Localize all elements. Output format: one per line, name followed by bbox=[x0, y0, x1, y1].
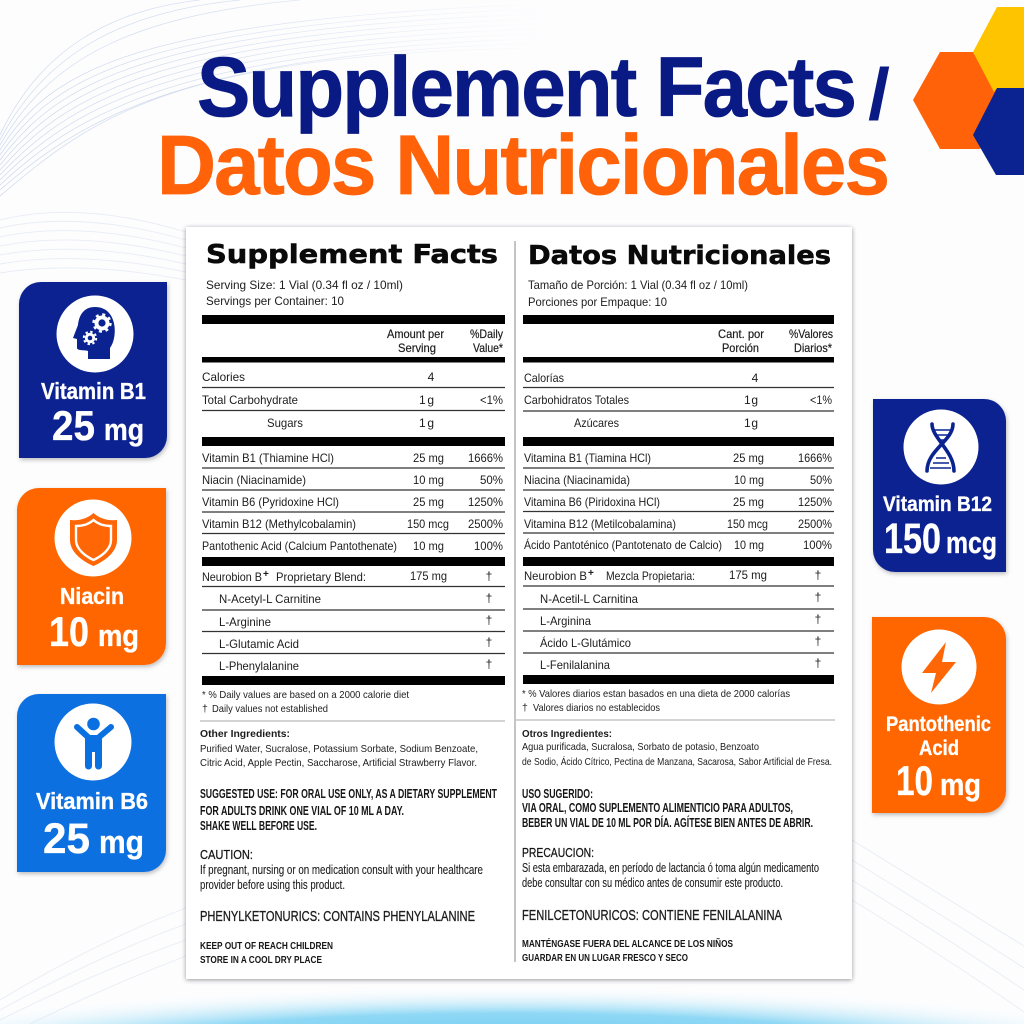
text: serving information bbox=[206, 278, 403, 308]
table: valores nutricionales: 1 g bbox=[744, 393, 758, 407]
table: valores nutricionales: Ácido L-Glutámico bbox=[540, 635, 631, 650]
panel: pantothenic acid badge: 10 bbox=[896, 757, 933, 804]
text: uso sugerido: BEBER UN VIAL DE 10 ML POR DÍA. AGÍTESE BIEN ANTES DE ABRIR. bbox=[522, 815, 813, 830]
text: other ingredients: Other Ingredients: bbox=[200, 728, 290, 740]
icon: DNA helix bbox=[927, 424, 954, 471]
table: nutrition values: L-Arginine bbox=[219, 615, 271, 629]
text: storage: KEEP OUT OF REACH CHILDREN bbox=[200, 941, 333, 952]
table: nutrition values: L-Phenylalanine bbox=[219, 659, 299, 673]
table: valores nutricionales: L-Fenilalanina bbox=[540, 658, 610, 672]
title: / bbox=[868, 55, 890, 135]
table: nutrition values: † bbox=[486, 657, 492, 671]
panel: vitamin B6 badge: 25 bbox=[43, 815, 90, 863]
text: precaución: debe consultar con su médico antes de consumir este producto. bbox=[522, 876, 783, 890]
text: almacenamiento bbox=[522, 937, 733, 964]
table: nutrition values: 1666% bbox=[468, 451, 503, 465]
table: nutrition values: Vitamin B6 (Pyridoxine HCl) bbox=[202, 495, 339, 509]
text: información de porción bbox=[528, 278, 748, 309]
table: valores nutricionales: 150 mcg bbox=[727, 517, 768, 531]
panel: vitamin B6 badge bbox=[17, 694, 166, 872]
table: nutrition values: 2500% bbox=[468, 517, 503, 531]
table: nutrition values: † bbox=[486, 635, 492, 649]
table: valores nutricionales: Vitamina B6 (Piridoxina HCl) bbox=[524, 495, 660, 509]
text: footnotes: † bbox=[202, 703, 208, 715]
panel: vitamin B12 badge: Vitamin B12 bbox=[883, 493, 992, 516]
text: información de porción: Tamaño de Porción: 1 Vial (0.34 fl oz / 10ml) bbox=[528, 278, 748, 292]
title: Supplement Facts bbox=[197, 40, 855, 134]
text: uso sugerido bbox=[522, 787, 813, 830]
table: nutrition values: Neurobion B bbox=[202, 570, 262, 584]
table: nutrition values: Calories bbox=[202, 370, 245, 384]
icon: shield bbox=[70, 513, 117, 566]
table: nutrition values: 25 mg bbox=[413, 451, 444, 465]
panel: vitamin B6 badge: mg bbox=[99, 824, 144, 860]
panel: supplement facts, English bbox=[200, 240, 505, 966]
table: valores nutricionales: Diarios* bbox=[794, 341, 832, 355]
table: nutrition values: Value* bbox=[473, 341, 503, 355]
icon: hexagon cluster bbox=[913, 7, 1024, 175]
text: storage: STORE IN A COOL DRY PLACE bbox=[200, 955, 322, 966]
panel: datos nutricionales, Spanish bbox=[516, 241, 835, 964]
table: valores nutricionales: † bbox=[815, 590, 821, 604]
table: nutrition values: 175 mg bbox=[410, 569, 447, 583]
icon: head with gears bbox=[73, 307, 115, 359]
table: nutrition values bbox=[202, 315, 505, 685]
table: valores nutricionales: 10 mg bbox=[734, 473, 764, 487]
text: precaución: PRECAUCION: bbox=[522, 846, 594, 860]
text: suggested use: FOR ADULTS DRINK ONE VIAL OF 10 ML A DAY. bbox=[200, 804, 404, 818]
text: footnotes: * % Daily values are based on a 2000 calorie diet bbox=[202, 689, 409, 701]
icon: person with raised arms bbox=[77, 718, 111, 770]
table: valores nutricionales: Carbohidratos Totales bbox=[524, 393, 629, 407]
text: almacenamiento: GUARDAR EN UN LUGAR FRESCO Y SECO bbox=[522, 953, 688, 964]
text: suggested use: SUGGESTED USE: FOR ORAL USE ONLY, AS A DIETARY SUPPLEMENT bbox=[200, 787, 497, 801]
panel: vitamin B1 badge: Vitamin B1 bbox=[41, 378, 146, 404]
table: valores nutricionales: N-Acetil-L Carnitina bbox=[540, 592, 638, 606]
table: valores nutricionales: Calorías bbox=[524, 371, 564, 385]
text: almacenamiento: MANTÉNGASE FUERA DEL ALCANCE DE LOS NIÑOS bbox=[522, 937, 733, 950]
text: other ingredients: Citric Acid, Apple Pectin, Saccharose, Artificial Strawberry Flavor. bbox=[200, 757, 477, 769]
table: nutrition values: 50% bbox=[480, 473, 503, 487]
panel: vitamin B1 badge: 25 bbox=[52, 402, 95, 449]
table: valores nutricionales: 100% bbox=[803, 538, 832, 552]
table: nutrition values: Sugars bbox=[267, 416, 303, 430]
text: caution: If pregnant, nursing or on medication consult with your healthcare bbox=[200, 863, 483, 877]
table: nutrition values: Proprietary Blend: bbox=[276, 570, 366, 584]
panel: facts label card bbox=[186, 227, 852, 979]
table: valores nutricionales: 25 mg bbox=[733, 495, 764, 509]
table: valores nutricionales: Porción bbox=[722, 341, 759, 355]
table: valores nutricionales: Cant. por bbox=[718, 327, 764, 341]
panel: vitamin B12 badge bbox=[873, 399, 1006, 572]
table: valores nutricionales: 1250% bbox=[798, 495, 832, 509]
text: notas al pie bbox=[522, 688, 790, 714]
table: valores nutricionales: 50% bbox=[810, 473, 832, 487]
text: suggested use: SHAKE WELL BEFORE USE. bbox=[200, 819, 317, 833]
panel: vitamin B6 badge: Vitamin B6 bbox=[36, 788, 148, 814]
table: nutrition values: 4 bbox=[428, 370, 435, 384]
table: valores nutricionales: L-Arginina bbox=[540, 614, 591, 628]
panel: pantothenic acid badge: mg bbox=[940, 767, 981, 802]
table: nutrition values: N-Acetyl-L Carnitine bbox=[219, 592, 321, 606]
table: valores nutricionales: 10 mg bbox=[734, 538, 764, 552]
table: nutrition values: 1 g bbox=[419, 416, 434, 430]
table: nutrition values: 10 mg bbox=[413, 539, 444, 553]
text: otros ingredientes: Agua purificada, Sucralosa, Sorbato de potasio, Benzoato bbox=[522, 741, 759, 753]
table: valores nutricionales: %Valores bbox=[789, 327, 833, 341]
table: nutrition values: 100% bbox=[474, 539, 503, 553]
table: valores nutricionales: † bbox=[815, 568, 821, 582]
heading: Datos Nutricionales: Datos Nutricionales bbox=[528, 241, 831, 271]
text: caution: CAUTION: bbox=[200, 848, 253, 862]
text: footnotes: Daily values not established bbox=[212, 703, 328, 715]
table: valores nutricionales: 175 mg bbox=[729, 568, 767, 582]
table: valores nutricionales bbox=[523, 315, 834, 684]
table: nutrition values: † bbox=[486, 591, 492, 605]
text: otros ingredientes: de Sodio, Ácido Cítrico, Pectina de Manzana, Sacarosa, Sabor Artificial de Fresa. bbox=[522, 755, 832, 768]
text: notas al pie: * % Valores diarios estan basados en una dieta de 2000 calorías bbox=[522, 688, 790, 700]
text: serving information: Serving Size: 1 Vial (0.34 fl oz / 10ml) bbox=[206, 278, 403, 292]
panel: vitamin B12 badge: 150 bbox=[884, 515, 941, 563]
table: nutrition values: Pantothenic Acid (Calcium Pantothenate) bbox=[202, 539, 397, 553]
table: nutrition values: 1 g bbox=[419, 393, 434, 407]
panel: vitamin B12 badge: mcg bbox=[946, 525, 997, 560]
text: precaución: Si esta embarazada, en período de lactancia ó toma algún medicamento bbox=[522, 861, 819, 875]
table: nutrition values: %Daily bbox=[470, 327, 503, 341]
table: valores nutricionales: 1666% bbox=[798, 451, 832, 465]
table: nutrition values: 25 mg bbox=[413, 495, 444, 509]
text: precaución bbox=[522, 846, 819, 890]
table: nutrition values: Total Carbohydrate bbox=[202, 393, 298, 407]
table: valores nutricionales: Azúcares bbox=[574, 416, 619, 430]
text: footnotes bbox=[202, 689, 409, 715]
table: valores nutricionales: Neurobion B bbox=[524, 569, 587, 583]
table: valores nutricionales: + bbox=[588, 568, 594, 579]
table: valores nutricionales: † bbox=[815, 612, 821, 626]
table: valores nutricionales: <1% bbox=[810, 393, 832, 407]
title: Datos Nutricionales bbox=[157, 118, 888, 212]
table: nutrition values: Serving bbox=[398, 341, 436, 355]
table: nutrition values: Vitamin B12 (Methylcobalamin) bbox=[202, 517, 356, 531]
panel: niacin badge: 10 bbox=[49, 608, 89, 655]
table: nutrition values: L-Glutamic Acid bbox=[219, 637, 299, 651]
table: valores nutricionales: 2500% bbox=[798, 517, 832, 531]
table: valores nutricionales: Mezcla Propietaria: bbox=[606, 569, 695, 583]
text: other ingredients: Purified Water, Sucralose, Potassium Sorbate, Sodium Benzoate, bbox=[200, 743, 478, 755]
icon: lightning bolt bbox=[922, 642, 956, 693]
table: nutrition values: 150 mcg bbox=[407, 517, 449, 531]
text: otros ingredientes: Otros Ingredientes: bbox=[522, 728, 612, 740]
text: phenylketonurics warning: PHENYLKETONURICS: CONTAINS PHENYLALANINE bbox=[200, 909, 475, 925]
table: nutrition values: † bbox=[486, 613, 492, 627]
panel: pantothenic acid badge: Pantothenic bbox=[886, 713, 991, 736]
table: valores nutricionales: Niacina (Niacinamida) bbox=[524, 473, 630, 487]
table: nutrition values: Vitamin B1 (Thiamine HCl) bbox=[202, 451, 334, 465]
panel: pantothenic acid badge bbox=[872, 617, 1006, 813]
text: serving information: Servings per Container: 10 bbox=[206, 294, 344, 308]
heading: Supplement Facts: Supplement Facts bbox=[206, 240, 498, 270]
table: nutrition values: 10 mg bbox=[413, 473, 444, 487]
table: valores nutricionales: Vitamina B12 (Metilcobalamina) bbox=[524, 517, 676, 531]
table: nutrition values: 1250% bbox=[468, 495, 503, 509]
text: caution bbox=[200, 848, 483, 892]
table: valores nutricionales: 4 bbox=[752, 371, 759, 385]
panel: vitamin B1 badge bbox=[19, 282, 167, 458]
table: valores nutricionales: † bbox=[815, 656, 821, 670]
text: notas al pie: † bbox=[522, 702, 528, 714]
table: nutrition values: † bbox=[486, 569, 492, 583]
table: valores nutricionales: Ácido Pantoténico (Pantotenato de Calcio) bbox=[524, 537, 722, 552]
table: nutrition values: Niacin (Niacinamide) bbox=[202, 473, 306, 487]
text: suggested use bbox=[200, 787, 497, 833]
panel: pantothenic acid badge: Acid bbox=[919, 737, 959, 760]
text: notas al pie: Valores diarios no establecidos bbox=[533, 702, 660, 714]
text: información de porción: Porciones por Empaque: 10 bbox=[528, 295, 667, 309]
table: nutrition values: Amount per bbox=[387, 327, 444, 341]
table: nutrition values: + bbox=[263, 569, 269, 580]
text: caution: provider before using this product. bbox=[200, 878, 345, 892]
text: uso sugerido: USO SUGERIDO: bbox=[522, 787, 593, 801]
table: valores nutricionales: 1 g bbox=[744, 416, 758, 430]
text: storage bbox=[200, 941, 333, 966]
panel: niacin badge: mg bbox=[98, 618, 139, 653]
panel: vitamin B1 badge: mg bbox=[104, 412, 144, 447]
table: nutrition values: <1% bbox=[480, 393, 503, 407]
text: other ingredients bbox=[200, 728, 478, 769]
title bbox=[157, 40, 890, 212]
table: valores nutricionales: † bbox=[815, 634, 821, 648]
text: otros ingredientes bbox=[522, 728, 832, 768]
panel: niacin badge: Niacin bbox=[60, 583, 124, 609]
text: uso sugerido: VIA ORAL, COMO SUPLEMENTO ALIMENTICIO PARA ADULTOS, bbox=[522, 801, 793, 815]
text: advertencia fenilcetonuricos: FENILCETONURICOS: CONTIENE FENILALANINA bbox=[522, 908, 782, 924]
table: valores nutricionales: 25 mg bbox=[733, 451, 764, 465]
panel: niacin badge bbox=[17, 488, 166, 665]
table: valores nutricionales: Vitamina B1 (Tiamina HCl) bbox=[524, 451, 651, 465]
